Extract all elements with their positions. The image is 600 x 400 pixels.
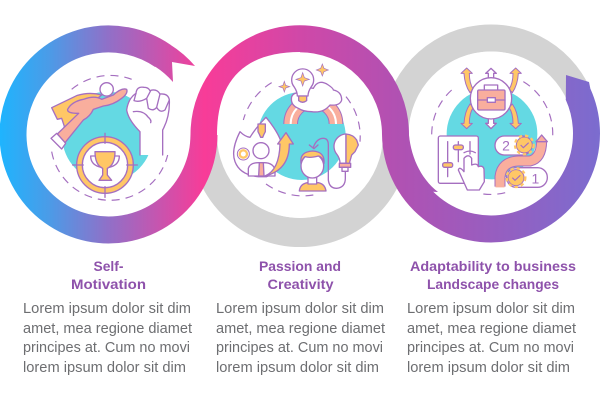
icon: cloud — [291, 82, 342, 112]
gradient ribbon — [13, 39, 590, 230]
grey ribbon segments — [204, 38, 578, 232]
text block: column 2: principes at. Cum no movi — [216, 340, 383, 356]
text block: column 3 — [407, 301, 576, 376]
icon: hand — [458, 156, 484, 190]
icon: wire — [309, 138, 345, 188]
icon: person — [299, 183, 326, 191]
heading: adaptability: Landscape changes — [427, 276, 559, 292]
heading: self motivation: Motivation — [71, 276, 146, 292]
text block: column 3: Lorem ipsum dolor sit dim — [407, 301, 575, 317]
icon: orange arrows — [461, 68, 521, 129]
icon: briefcase circle — [470, 78, 512, 119]
heading: passion and creativity: Creativity — [268, 276, 334, 292]
icon: rising arrow — [265, 133, 293, 176]
icon: pill 1: 1 — [531, 170, 539, 186]
text block: column 1: principes at. Cum no movi — [23, 340, 190, 356]
heading: adaptability: Adaptability to business — [410, 258, 576, 274]
icon: side bulb — [334, 134, 346, 163]
icon: white arrows — [486, 68, 496, 129]
text block: column 2: lorem ipsum dolor sit dim — [216, 360, 379, 376]
text block: column 2: Lorem ipsum dolor sit dim — [216, 301, 384, 317]
icon: adaptability — [432, 68, 553, 194]
icon: stars — [279, 64, 328, 92]
text block: column 1 — [23, 301, 192, 376]
icon: fist — [127, 87, 169, 155]
text block: column 3: amet, mea regione diamet — [407, 321, 576, 337]
icon: target ring — [77, 137, 133, 193]
heading: passion and creativity — [259, 258, 341, 292]
text block: column 2 — [216, 301, 385, 376]
icon: arm — [57, 89, 127, 143]
icon: path ribbon — [500, 141, 542, 187]
text block: column 3: lorem ipsum dolor sit dim — [407, 360, 570, 376]
icon: top bulb — [292, 69, 314, 96]
heading: adaptability — [410, 258, 576, 292]
heading: passion and creativity: Passion and — [259, 258, 341, 274]
icon: slider panel — [438, 136, 478, 183]
icon: passion and creativity — [234, 64, 360, 196]
text block: column 1: lorem ipsum dolor sit dim — [23, 360, 186, 376]
icon: head — [100, 83, 113, 96]
heading: self motivation — [71, 258, 146, 292]
text block: column 1: amet, mea regione diamet — [23, 321, 192, 337]
icon: cuff — [51, 133, 66, 149]
text block: column 1: Lorem ipsum dolor sit dim — [23, 301, 191, 317]
icon: self motivation — [51, 75, 173, 200]
white discs — [26, 52, 574, 218]
icon: trophy — [95, 152, 115, 180]
icon: rainbow — [291, 101, 336, 124]
icon: briefcase — [484, 85, 498, 90]
icon: flame person — [234, 117, 283, 177]
heading: self motivation: Self- — [94, 258, 124, 274]
icon: cape — [52, 93, 102, 128]
icon: pill 2: 2 — [502, 137, 510, 153]
text block: column 2: amet, mea regione diamet — [216, 321, 385, 337]
text block: column 3: principes at. Cum no movi — [407, 340, 574, 356]
